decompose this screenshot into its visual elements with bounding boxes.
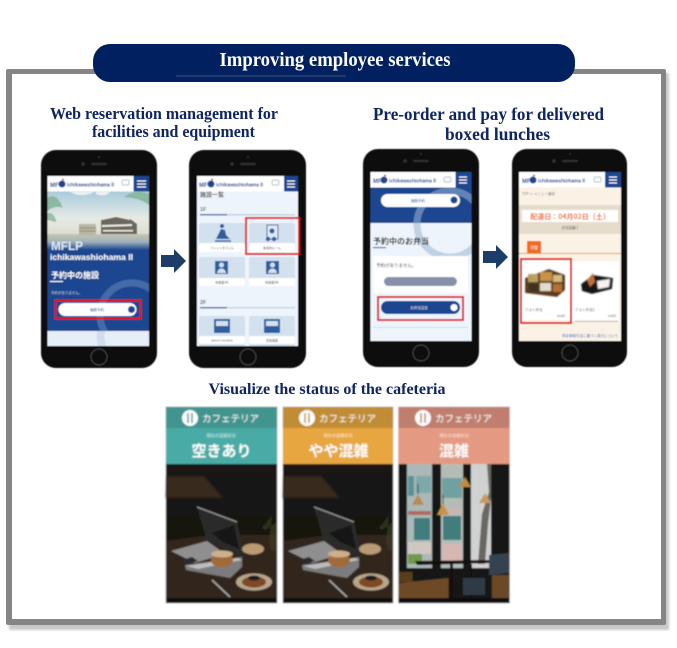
highlight box: [521, 259, 571, 323]
phone 4: lunch menu: 洋食: [530, 244, 538, 251]
app header: MF: [522, 179, 531, 185]
facility tiles: 休憩室(M): [215, 280, 229, 284]
heading: boxed lunches: [373, 104, 604, 144]
app header: MF: [373, 179, 382, 185]
phone 3: lunch reservations: [363, 149, 483, 367]
phone 4: lunch menu: 配達日：04月02日（土）: [530, 212, 610, 222]
photo: laptop and coffee: [166, 464, 277, 603]
hero image: [48, 191, 149, 250]
phone 1: facility home: 施設予約: [90, 307, 104, 313]
cafeteria card: available: [166, 406, 278, 604]
food photo: tray: [581, 273, 613, 294]
cafeteria card: available: 現在の混雑状況: [206, 432, 236, 439]
photo: cafe interior: [398, 464, 510, 603]
cafeteria card: slightly busy: [282, 406, 394, 604]
phone 3: lunch reservations: 予約がありません。: [376, 262, 416, 269]
app header: MF: [50, 183, 59, 189]
app header: MF: [199, 183, 208, 189]
photo: laptop and coffee: [283, 464, 393, 603]
app header: [197, 176, 298, 192]
facility tiles: 多目的ルーム: [263, 245, 281, 250]
title banner: Improving employee services: [220, 49, 451, 71]
phone 3: lunch reservations: 予約中のお弁当: [373, 236, 429, 247]
phone 4: lunch menu: テスト弁当: [525, 307, 543, 313]
highlight box: [378, 297, 463, 320]
cafeteria card: available: カフェテリア: [202, 411, 259, 425]
cafeteria card: available: 空きあり: [191, 440, 252, 461]
app header: [370, 172, 472, 188]
facility tiles: MFLP LOUNGE: [211, 338, 233, 342]
heading: web reservation: facilities and equipment: [92, 122, 255, 141]
phone 2: facility list: 1F: [200, 207, 207, 213]
phone 4: lunch menu: TOP ＞ メニュー選択: [522, 191, 555, 197]
arrow: [161, 249, 186, 273]
phone 3: lunch reservations: 施設予約: [411, 198, 425, 204]
app header: ichikawashiohama II: [538, 178, 585, 184]
phone 4: lunch menu: [512, 149, 627, 367]
phone 2: facility list: 施設一覧: [200, 190, 224, 199]
phone 2: facility list: 2F: [200, 300, 207, 306]
title banner: [93, 44, 575, 82]
app header: ichikawashiohama II: [67, 182, 114, 188]
heading: web reservation: [50, 104, 278, 141]
phone 4: lunch menu: 540円: [557, 314, 565, 318]
phone 3: lunch reservations: お弁当注文: [410, 305, 428, 311]
cafeteria card: crowded: カフェテリア: [435, 411, 492, 425]
app header: [48, 176, 149, 192]
facility tiles: フィットネスジム: [210, 245, 234, 250]
phone 1: facility home: 予約中の施設: [51, 270, 99, 281]
app header: ichikawashiohama II: [216, 182, 263, 188]
cafeteria card: slightly busy: カフェテリア: [319, 411, 376, 425]
food photo: bento: [525, 269, 565, 297]
cafeteria card: crowded: 現在の混雑状況: [439, 432, 469, 439]
cafeteria card: crowded: [398, 406, 510, 604]
heading: boxed lunches: boxed lunches: [445, 124, 550, 144]
facility tiles: 休憩室(W): [265, 280, 279, 284]
highlight box: [246, 218, 299, 254]
heading: boxed lunches: Pre-order and pay for delivered: [373, 104, 604, 124]
facility tiles: 貸会議室: [266, 338, 278, 342]
phone 2: facility list: [189, 150, 306, 368]
phone 4: lunch menu: 特定商取引法に基づく表示について: [562, 333, 618, 339]
facility tiles: [199, 223, 295, 346]
phone 1: facility home: [41, 150, 164, 368]
arrow: [483, 245, 508, 269]
cafeteria card: slightly busy: 現在の混雑状況: [323, 432, 353, 439]
phone 1: facility home: MFLP: [51, 241, 83, 253]
app header: [519, 172, 621, 188]
phone 1: facility home: 予約がありません。: [51, 290, 82, 296]
phone 4: lunch menu: 弁当容器 1: [562, 225, 578, 231]
cafeteria card: crowded: 混雑: [439, 440, 469, 461]
phone 4: lunch menu: テスト弁当2: [575, 307, 594, 313]
heading: web reservation: Web reservation management for: [50, 104, 278, 123]
cafeteria card: slightly busy: やや混雑: [308, 440, 369, 461]
phone 1: facility home: ichikawashiohama II: [50, 253, 133, 262]
highlight box: [56, 300, 140, 318]
heading: cafeteria: Visualize the status of the cafeteria: [208, 381, 446, 398]
phone 4: lunch menu: 540円: [608, 314, 616, 318]
app header: ichikawashiohama II: [389, 178, 436, 184]
